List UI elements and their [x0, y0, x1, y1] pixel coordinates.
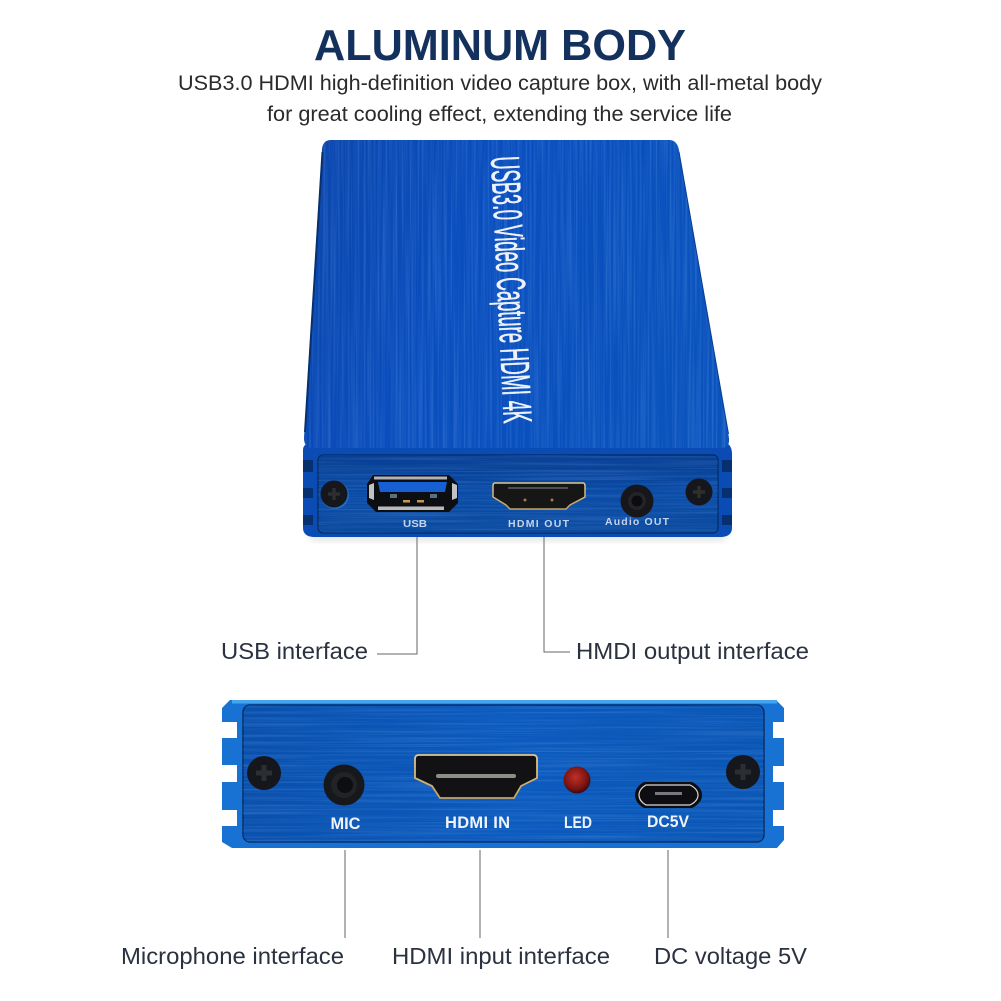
- callout: USB interface: [221, 537, 417, 664]
- infographic canvas: [122, 30, 822, 969]
- callout: HDMI output interface: HMDI output interface: [576, 638, 809, 664]
- printed product name: USB3.0 Video Capture HDMI 4K: [481, 155, 539, 424]
- front body: [303, 442, 732, 537]
- device shadow: [310, 532, 725, 540]
- LED indicator: [564, 766, 590, 794]
- inner panel: [243, 705, 764, 842]
- MIC label: MIC: [330, 815, 361, 833]
- callout: HDMI input interface: HDMI input interface: [392, 943, 610, 969]
- Audio OUT label: Audio OUT: [605, 516, 670, 528]
- HDMI output port: [493, 483, 585, 509]
- microphone jack: [324, 764, 364, 806]
- callout: USB interface: USB interface: [221, 638, 368, 664]
- HDMI input port: [415, 755, 537, 798]
- callout: Microphone interface: Microphone interface: [121, 943, 344, 969]
- left screw: [247, 756, 281, 790]
- DC5V label: DC5V: [647, 813, 689, 831]
- subtitle text: USB3.0 HDMI high-definition video capture box, with all-metal body: [178, 71, 822, 95]
- USB label: USB: [403, 518, 427, 530]
- left screw: [320, 480, 349, 509]
- title: ALUMINUM BODY: [314, 21, 686, 70]
- front panel: [318, 455, 718, 533]
- device: upper capture box: [300, 138, 735, 540]
- LED label: LED: [564, 814, 592, 832]
- callout: DC voltage 5V: DC voltage 5V: [654, 943, 808, 969]
- HDMI OUT label: HDMI OUT: [508, 518, 570, 530]
- side cooling fins: [303, 460, 732, 525]
- body top highlight: [232, 700, 777, 704]
- micro USB port: [635, 782, 702, 808]
- top face: [300, 138, 735, 450]
- HDMI IN label: HDMI IN: [445, 814, 510, 832]
- subtitle text: for great cooling effect, extending the service life: [267, 102, 732, 126]
- audio out jack: [620, 484, 654, 518]
- subtitle text: [178, 71, 822, 126]
- USB port: [367, 475, 458, 512]
- outer body: [222, 700, 784, 848]
- callout: HDMI output interface: [544, 537, 809, 664]
- right screw: [726, 755, 760, 789]
- device: lower capture box end: [222, 700, 784, 848]
- right screw: [686, 478, 712, 506]
